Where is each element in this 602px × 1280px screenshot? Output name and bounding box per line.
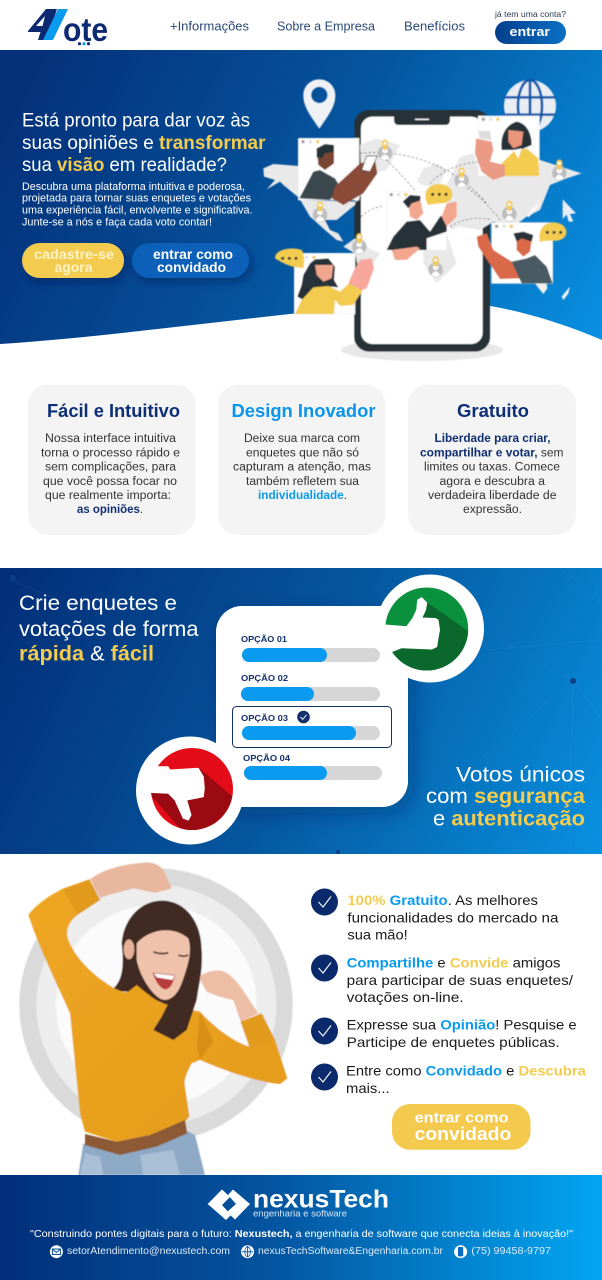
eyes: [153, 952, 188, 956]
login button: [495, 21, 566, 44]
hero illustration: [263, 79, 582, 361]
card: Design Inovador: Design Inovador: [232, 401, 376, 421]
person: man top left: [298, 138, 377, 205]
person: woman bottom left: [275, 248, 374, 314]
navigation links: [170, 18, 466, 34]
ground shadow: [341, 339, 503, 361]
heading: votos únicos: Votos únicos: [456, 764, 585, 786]
icon: thumbs down: [136, 736, 244, 844]
poll panel: [0, 568, 602, 854]
hero description: [22, 181, 252, 228]
benefit 1: [311, 888, 559, 942]
option 04: OPÇÃO 04: [243, 753, 290, 763]
card: Fácil e Intuitivo: que realmente importa:: [45, 490, 171, 502]
logo: 4Vote: [28, 9, 108, 48]
hero headline: sua visão em realidade?: [22, 154, 227, 176]
button: entrar como convidado: [132, 243, 249, 278]
feature cards: [28, 384, 576, 535]
hair front: [153, 960, 202, 1040]
benefit 1: funcionalidades do mercado na: [347, 909, 559, 925]
connection arcs: [360, 153, 500, 227]
heading: votos únicos: [426, 764, 585, 830]
option 01: [241, 634, 380, 662]
card: Fácil e Intuitivo: torna o processo rápido e: [41, 448, 180, 460]
person: man bottom right: [477, 222, 566, 283]
jeans: [78, 1132, 205, 1175]
poll card: [216, 606, 408, 807]
option 02: OPÇÃO 02: [241, 673, 288, 683]
navigation links: Sobre a Empresa: [277, 18, 376, 34]
heading: votos únicos: com segurança: [426, 785, 585, 808]
card: Design Inovador: enquetes que não só: [246, 448, 359, 460]
benefit 4: Entre como Convidado e Descubra: [346, 1063, 586, 1079]
button: cadastre-se agora: [22, 243, 124, 278]
hero headline: suas opiniões e transformar: [22, 132, 266, 154]
footer: [0, 1175, 602, 1280]
person: woman top right: [475, 116, 539, 180]
logo: nexusTech: engenharia e software: [253, 1209, 347, 1220]
hero description: Junte-se a nós e faça cada voto contar!: [22, 216, 212, 228]
icon: cursor: [563, 199, 576, 222]
contact: phone: (75) 99458-9797: [471, 1246, 551, 1257]
option 03 selected: OPÇÃO 03: [241, 713, 288, 723]
hero description: uma experiência fácil, envolvente e significativa.: [22, 204, 252, 216]
benefit 4: mais...: [346, 1080, 390, 1096]
card: Fácil e Intuitivo: que você possa focar no: [43, 476, 177, 488]
face: [124, 939, 134, 959]
hero description: projetada para tornar suas enquetes e votações: [22, 192, 251, 204]
benefit 1: 100% Gratuito . As melhores: [347, 892, 538, 908]
heading: crie enquetes: votações de forma: [19, 618, 199, 641]
heading: votos únicos: e autenticação: [433, 808, 585, 830]
card: Gratuito: Gratuito: [457, 401, 529, 421]
benefits panel: [19, 863, 586, 1175]
footer quote: "Construindo pontes digitais para o futuro: Nexustech, a engenharia de software que conecta ideias à inovação!": [30, 1228, 573, 1240]
mouth: [153, 973, 175, 989]
benefit 2: Compartilhe e Convide amigos: [347, 955, 560, 971]
benefit 4: [311, 1063, 586, 1096]
logo: nexusTech: nexusTech: [253, 1186, 389, 1214]
phone: [354, 110, 490, 352]
button: cadastre-se agora: cadastre-se: [34, 247, 115, 262]
login prompt: já tem uma conta?: [494, 9, 566, 19]
card: Gratuito: agora e descubra a: [440, 476, 546, 488]
location markers: [313, 140, 567, 277]
world map: [263, 138, 582, 300]
card: Design Inovador: individualidade.: [258, 490, 347, 502]
hero background: [0, 50, 602, 344]
card: Gratuito: verdadeira liberdade de: [428, 490, 556, 502]
card: Design Inovador: capturam a atenção, mas: [233, 462, 371, 474]
contact: email: setorAtendimento@nexustech.com: [67, 1246, 230, 1257]
hero description: Descubra uma plataforma intuitiva e poderosa,: [22, 181, 245, 193]
hero panel: [0, 50, 602, 361]
sweater: [28, 879, 287, 1142]
button: cadastre-se agora: agora: [54, 260, 93, 275]
navigation links: Benefícios: [404, 18, 466, 34]
option 03 selected: [232, 706, 392, 748]
login button: entrar: [510, 24, 550, 39]
button: entrar como convidado: entrar como: [415, 1110, 509, 1127]
button: entrar como convidado: entrar como: [153, 247, 233, 262]
benefit 1: sua mão!: [347, 926, 408, 942]
icon: location pin: [303, 79, 335, 129]
heading: crie enquetes: Crie enquetes e: [19, 592, 177, 615]
card: Gratuito: compartilhar e votar, sem: [420, 448, 564, 460]
card: Gratuito: limites ou taxas. Comece: [424, 462, 560, 474]
hair back: [111, 901, 202, 1040]
card: Gratuito: expressão.: [463, 504, 522, 516]
heading: crie enquetes: rápida & fácil: [19, 642, 154, 666]
contact: phone: [454, 1245, 551, 1258]
card: Design Inovador: Deixe sua marca com: [244, 433, 360, 445]
benefit 2: [311, 954, 573, 1005]
card: Design Inovador: [218, 384, 386, 535]
benefit 3: Expresse sua Opinião! Pesquise e: [347, 1017, 577, 1033]
card: Fácil e Intuitivo: [28, 384, 196, 535]
heading: crie enquetes: [19, 592, 199, 666]
card: Fácil e Intuitivo: sem complicações, para: [45, 462, 177, 474]
card: Gratuito: [408, 384, 576, 535]
benefit 3: Participe de enquetes públicas.: [347, 1034, 560, 1050]
hero headline: [22, 110, 266, 176]
hero headline: Está pronto para dar voz às: [22, 110, 250, 132]
benefit 2: votações on-line.: [347, 989, 464, 1005]
navigation links: +Informações: [170, 18, 249, 34]
logo: 4Vote: ote: [63, 11, 108, 48]
card: Gratuito: Liberdade para criar,: [434, 433, 550, 445]
button: entrar como convidado: convidado: [157, 260, 226, 275]
contact: website: nexusTechSoftware&Engenharia.com.br: [258, 1246, 444, 1257]
header: [28, 9, 566, 48]
person: man centre: [387, 184, 457, 260]
benefit 3: [311, 1017, 577, 1050]
card: Fácil e Intuitivo: Nossa interface intuitiva: [45, 433, 177, 445]
photo: smiling woman in yellow sweater: [19, 863, 293, 1175]
option 01: OPÇÃO 01: [241, 634, 287, 644]
logo: nexusTech: [208, 1186, 389, 1220]
belt: [85, 1120, 187, 1155]
option 04: [243, 753, 382, 780]
benefit 2: para participar de suas enquetes/: [347, 972, 573, 988]
icon: thumbs up: [376, 574, 484, 682]
card: Fácil e Intuitivo: Fácil e Intuitivo: [47, 401, 180, 421]
icon: globe: [504, 80, 556, 140]
card: Fácil e Intuitivo: as opiniões.: [77, 504, 143, 516]
option 02: [241, 673, 380, 701]
button: entrar como convidado: [392, 1104, 530, 1150]
raised arm skin: [90, 863, 172, 897]
button: entrar como convidado: convidado: [415, 1124, 511, 1144]
poll background: [0, 568, 602, 854]
card: Design Inovador: também refletem sua: [246, 476, 360, 488]
